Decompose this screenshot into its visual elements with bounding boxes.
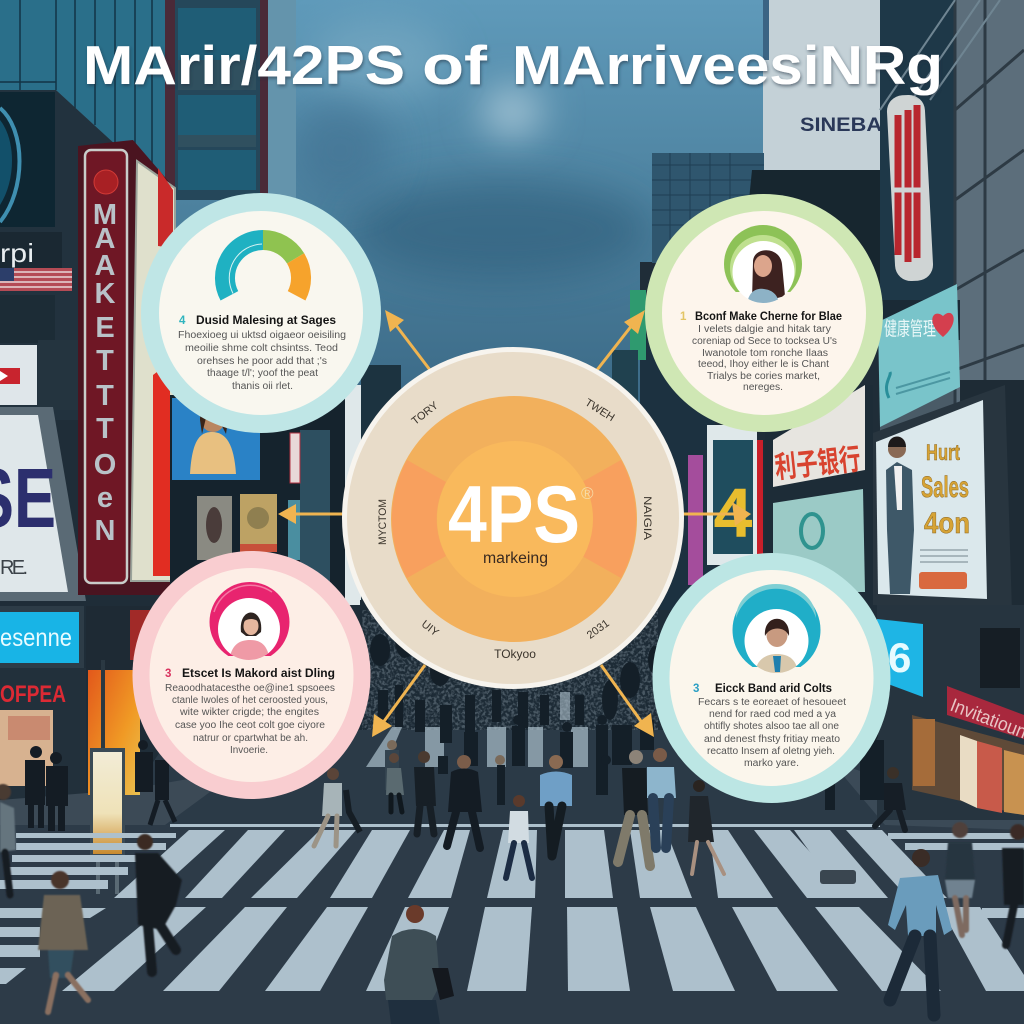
background crowd — [370, 622, 884, 810]
heading: 4 — [179, 315, 186, 327]
sign: sineba: SINEBA — [800, 115, 882, 136]
body text: teeod, Ihoy either le is Chant — [698, 359, 829, 370]
sign: esenne — [0, 606, 84, 668]
billboard gold lettering — [921, 440, 970, 540]
right wedge — [582, 460, 636, 578]
pedestrian: blue shirt — [540, 755, 572, 856]
body text: marko yare. — [744, 758, 799, 769]
sign letters — [93, 199, 117, 547]
heading: 1 — [680, 311, 687, 323]
yellow 4 poster — [707, 425, 763, 565]
sign letters: A — [95, 250, 116, 282]
ring labels: TOkyoo — [494, 647, 536, 661]
body text: thaage t/l'; yoof the peat — [207, 368, 318, 379]
body text: I velets dalgie and hitak tary — [698, 324, 831, 335]
body text: ctanle Iwoles of het ceroosted yous, — [172, 695, 328, 706]
pedestrian: pale coat — [314, 768, 360, 846]
pedestrian: light blue top — [647, 748, 676, 848]
body text: recatto Insem af oletng yieh. — [707, 746, 835, 757]
big white sign: RE. — [0, 557, 28, 579]
ring labels: TWEH — [583, 397, 617, 424]
orange disc — [391, 396, 637, 642]
big white sign — [0, 407, 86, 601]
storefront: ofpea: OFPEA — [0, 681, 66, 708]
title: MArriveesiNRg — [512, 34, 943, 96]
pedestrian: dark suit centre — [447, 755, 482, 848]
body text: Reaoodhatacesthe oe@ine1 spsoees — [165, 683, 335, 694]
heading: 3 — [165, 668, 171, 680]
small white sign — [0, 345, 37, 405]
poster: portrait — [197, 496, 232, 560]
heading: 3 — [693, 683, 699, 695]
central 4PS wheel — [342, 347, 684, 689]
sign: rpi neon: rpi — [0, 238, 34, 268]
body text: Iwanotole tom ronche Ilaas — [702, 348, 828, 359]
pedestrian: right edge figure — [1002, 824, 1024, 945]
pedestrian: blurred man in black — [135, 834, 182, 972]
body text: nend for raed cod med a ya — [709, 709, 836, 720]
body text: wite wikter crigde; the engites — [179, 707, 319, 718]
ring labels: UIY — [419, 618, 441, 639]
body text — [165, 683, 335, 756]
body text: Fhoexioeg ui uktsd oigaeor oeisiling — [178, 330, 346, 341]
pedestrians — [0, 740, 1024, 1024]
left side signs — [0, 238, 86, 803]
ring labels — [377, 397, 653, 661]
pedestrians: store front group — [25, 740, 175, 831]
icon: segmented gauge — [225, 240, 301, 296]
body text: natrur or cpartwhat be ah. — [193, 733, 308, 744]
body text — [178, 330, 346, 392]
arrow: center to bottom right — [601, 665, 654, 737]
pedestrian: blurred right woman — [945, 822, 975, 935]
teal billboard: 健康管理 — [884, 318, 936, 340]
body text: orehses he poor add that ;'s — [197, 356, 327, 367]
body text — [698, 697, 846, 769]
body text: ohtifly shotes alsoo tae all one — [704, 721, 839, 732]
sign letters: E — [95, 312, 115, 344]
registered mark: ® — [581, 484, 594, 503]
sign letters: T — [96, 413, 114, 445]
pedestrian: dark dress — [688, 780, 724, 874]
body text: nereges. — [743, 382, 783, 393]
sign letters: T — [96, 380, 114, 412]
title: MArir/42PS — [83, 34, 405, 96]
emblem — [94, 170, 118, 194]
billboard man — [886, 436, 914, 594]
info kiosk — [90, 748, 125, 894]
body text: Trialys be cories market, — [707, 371, 820, 382]
title: of — [422, 34, 488, 96]
yellow 4 poster: 4 — [714, 474, 753, 552]
pedestrian: grey jacket — [386, 753, 404, 812]
body text — [692, 324, 837, 393]
ring labels: MYCTOM — [377, 499, 389, 545]
arrow: center to right — [683, 502, 751, 526]
storefront: ofpea — [0, 668, 86, 803]
body text: thanis oii rlet. — [232, 381, 293, 392]
ring labels: TORY — [410, 399, 441, 428]
pedestrian: denim shirt man — [888, 849, 952, 1015]
red vertical sign — [886, 94, 934, 282]
sign letters: N — [95, 515, 115, 547]
heading: Eicck Band arid Colts — [715, 683, 832, 695]
4PS logo: 4PS — [448, 470, 580, 560]
sign letters: T — [96, 345, 114, 377]
maroon vertical sign — [78, 140, 176, 595]
arrow: center to left — [278, 504, 345, 524]
panel: top right circle — [645, 194, 883, 432]
left lower poster and kiosk — [86, 606, 176, 894]
pedestrian: child white shirt — [506, 795, 532, 878]
teal billboard — [878, 284, 960, 427]
billboard gold lettering: Hurt — [926, 440, 961, 465]
crosswalk stripes — [0, 692, 1024, 991]
panel: bottom left circle — [132, 551, 370, 799]
pedestrian: beige trousers — [618, 750, 650, 866]
ring labels: 2031 — [585, 618, 612, 642]
sign letters: O — [94, 449, 116, 481]
sign letters: A — [95, 223, 116, 255]
right lower storefronts — [877, 605, 1024, 820]
billboard gold lettering: Sales — [921, 471, 969, 504]
heading: Dusid Malesing at Sages — [196, 315, 336, 327]
icon: woman portrait — [724, 225, 802, 306]
cyan sign: 6 — [888, 634, 911, 681]
red character billboard — [773, 385, 865, 487]
cyan sign — [877, 619, 923, 697]
body text: Invoerie. — [230, 745, 268, 756]
sign letters: M — [93, 199, 117, 231]
ground and road — [0, 600, 1024, 1024]
sky background — [0, 0, 1024, 640]
left wedge — [392, 460, 446, 578]
left screens and posters — [172, 398, 300, 560]
sign letters: e — [97, 482, 113, 514]
body text: case yoo Ihe ceot colt goe ciyore — [175, 720, 325, 731]
arrow: center to bottom left — [372, 665, 425, 737]
store window — [912, 715, 1024, 815]
body text: Fecars s te eoreaet of hesoueet — [698, 697, 846, 708]
large sales billboard — [870, 385, 1012, 612]
sign: esenne: esenne — [0, 624, 72, 652]
poster: gold — [240, 494, 277, 552]
pedestrian: left edge figure — [0, 784, 16, 895]
arrow: center to top right — [597, 310, 645, 370]
title — [83, 34, 943, 96]
inner disc — [437, 441, 593, 597]
body text: meoilie shme colt chsintss. Teod — [185, 343, 338, 354]
heading: Bconf Make Cherne for Blae — [695, 311, 842, 323]
dark street level backdrop — [0, 262, 1024, 820]
billboard gold lettering: 4on — [924, 507, 970, 540]
blue screen — [172, 398, 260, 480]
right buildings — [652, 0, 1024, 620]
red character billboard: 利子银行 — [773, 443, 862, 485]
icon: woman in pink — [210, 582, 290, 662]
left buildings — [0, 0, 296, 420]
flag banner — [0, 268, 72, 291]
pedestrian: hoodie — [384, 905, 454, 1024]
panel: top left circle — [141, 193, 381, 433]
pedestrian: blurred woman with coat — [38, 871, 88, 1012]
marketing caption: markeing — [483, 550, 548, 567]
pedestrian: dark walker — [414, 751, 436, 834]
right center billboards — [688, 385, 873, 600]
ring labels: NAIGIA — [641, 496, 653, 541]
teal logo billboard — [773, 489, 865, 592]
body text: and denest fhsty fritiay meato — [704, 734, 840, 745]
sign letters: K — [95, 278, 116, 310]
pedestrian: right sidewalk walker — [875, 767, 906, 830]
arrow: center to top left — [385, 310, 430, 370]
heading: Etscet Is Makord aist Dling — [182, 668, 335, 680]
icon: person with jacket — [732, 584, 820, 674]
body text: coreniap od Sece to tocksea U's — [692, 336, 837, 347]
panel: bottom right circle — [652, 553, 890, 803]
center background buildings — [170, 290, 715, 610]
